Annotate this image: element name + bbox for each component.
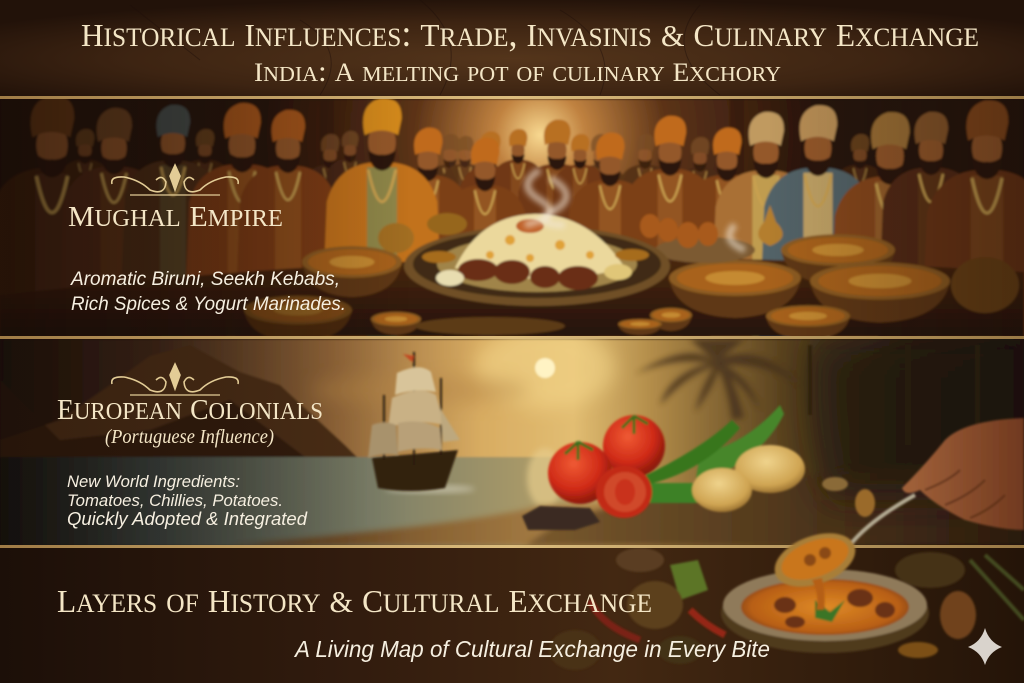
forest (808, 339, 1024, 500)
palm (635, 339, 800, 420)
title: Historical Influences: Trade, Invasinis & Culinary Exchange (81, 14, 979, 55)
description: New World ingredients: Quickly Adopted & Integrated (67, 509, 308, 529)
description: Mughal dishes: Rich Spices & Yogurt Marinades. (71, 294, 346, 315)
ornament: European flourish (112, 364, 238, 395)
coastal scene illustration (0, 328, 1024, 546)
curry pan (721, 569, 929, 653)
heading: Layers of History: Layers of History & Cultural Exchange (57, 580, 652, 621)
section divider top (0, 96, 1024, 99)
description: Mughal dishes: Aromatic Biruni, Seekh Kebabs, (70, 269, 340, 290)
spices and vegetables around the pan (549, 548, 1024, 670)
left darkening (0, 339, 358, 545)
hand with spoon pouring curry (767, 418, 1024, 610)
steam (525, 170, 745, 250)
subheading: Portuguese Influence: (Portuguese Influence) (105, 426, 274, 448)
panel: European Colonials (0, 328, 1024, 546)
serving vessels (781, 234, 895, 285)
ornament: Mughal flourish (112, 165, 238, 195)
header background (0, 0, 1024, 98)
subtitle: India: A melting pot of culinary Exchory (254, 55, 781, 88)
panel: Layers of History (164, 548, 1024, 683)
tagline: A Living Map of Cultural Exchange in Every Bite (293, 636, 770, 662)
tomatoes, chillies and potatoes (522, 405, 875, 530)
section dividers (0, 336, 1024, 548)
feast scene illustration (0, 99, 1024, 336)
heading: Mughal Empire: Mughal Empire (68, 197, 283, 234)
ship (368, 352, 460, 491)
panel: Mughal Empire (0, 95, 1024, 470)
description: New World ingredients: Tomatoes, Chillies, Potatoes. (67, 491, 283, 510)
icon: sparkle (968, 628, 1002, 665)
description: New World ingredients: New World Ingredients: (67, 472, 240, 491)
dark overlays (0, 99, 1024, 337)
heading: European Colonials: European Colonials (57, 390, 323, 427)
